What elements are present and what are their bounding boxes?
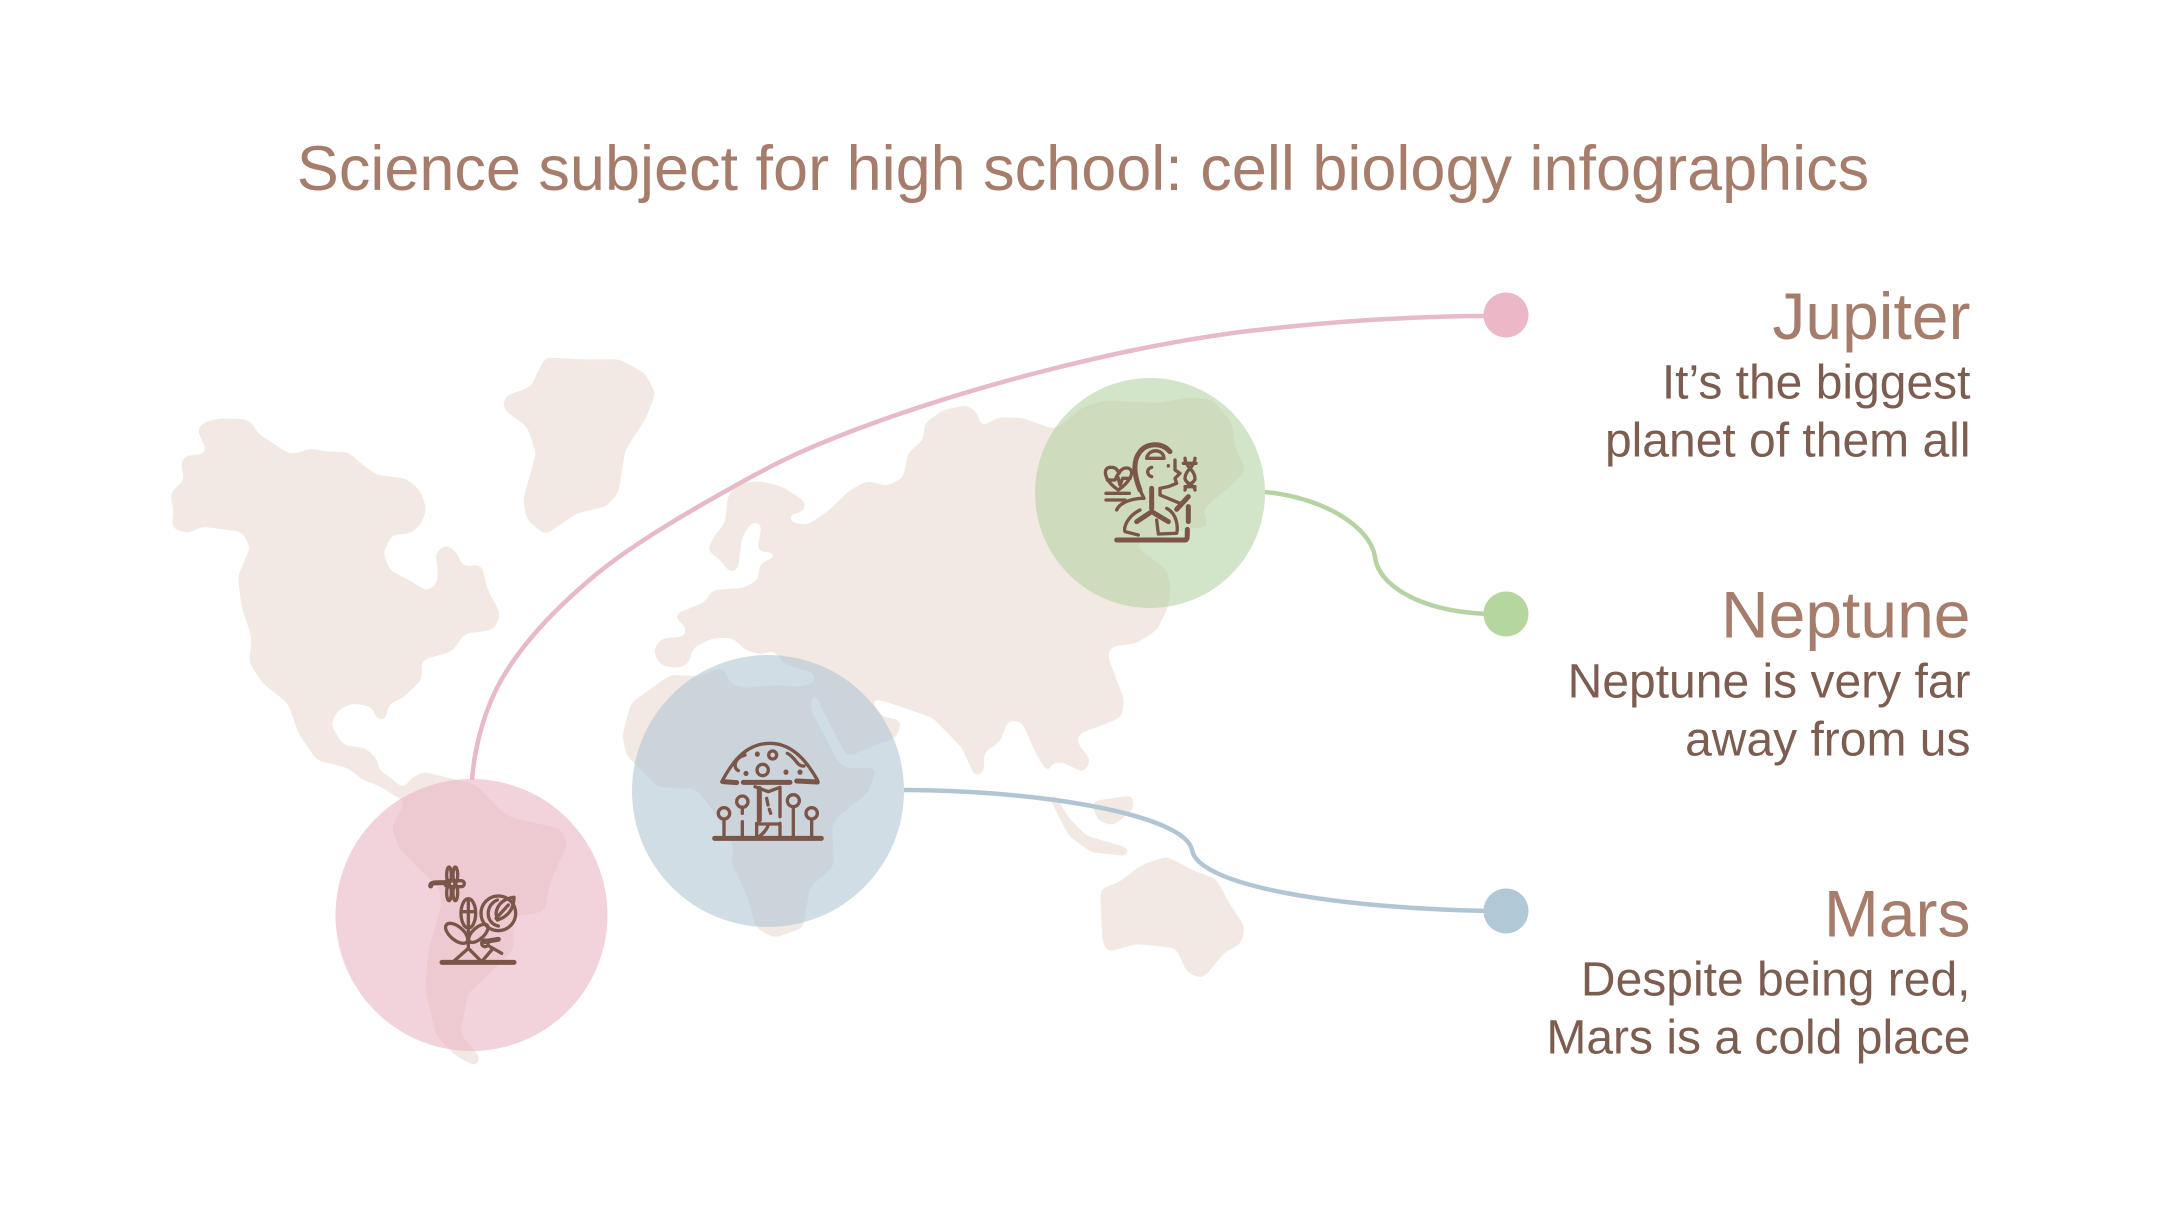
world map <box>170 357 1246 1067</box>
title: Science subject for high school: cell biology infographics <box>297 134 1869 204</box>
text block: neptune: Neptune <box>1721 578 1970 652</box>
text block: jupiter <box>1605 279 1970 468</box>
text block: neptune: Neptune is very far <box>1568 656 1971 708</box>
text block: mars: Mars is a cold place <box>1546 1012 1970 1064</box>
connector: mars <box>904 790 1490 911</box>
text block: mars <box>1546 876 1970 1064</box>
text block: neptune: away from us <box>1685 714 1970 766</box>
map: eurasia <box>653 397 1246 799</box>
icon: plant and dragonfly <box>431 867 516 962</box>
text block: jupiter: It’s the biggest <box>1662 356 1970 410</box>
circle: blue <box>632 655 904 927</box>
map: indonesia <box>1046 793 1129 856</box>
icon: mushroom <box>715 743 821 838</box>
circle: pink <box>336 779 608 1051</box>
text block: jupiter: planet of them all <box>1605 414 1970 468</box>
map: africa <box>622 667 877 938</box>
map: greenland <box>504 357 656 535</box>
text block: jupiter: Jupiter <box>1772 279 1970 353</box>
circle: green <box>1035 378 1265 608</box>
map: north america <box>170 418 500 800</box>
text block: mars: Despite being red, <box>1581 954 1970 1006</box>
marker: jupiter dot <box>1484 292 1528 338</box>
map: new guinea <box>1091 795 1133 826</box>
icon: human body and dna <box>1105 445 1196 540</box>
map: australia <box>1100 856 1245 979</box>
marker: mars dot <box>1484 888 1528 934</box>
map: south america <box>392 772 568 1067</box>
text block: neptune <box>1568 578 1971 766</box>
marker: neptune dot <box>1484 592 1528 636</box>
text block: mars: Mars <box>1824 876 1970 950</box>
connector: neptune <box>1265 492 1490 614</box>
connector: jupiter <box>472 316 1490 780</box>
